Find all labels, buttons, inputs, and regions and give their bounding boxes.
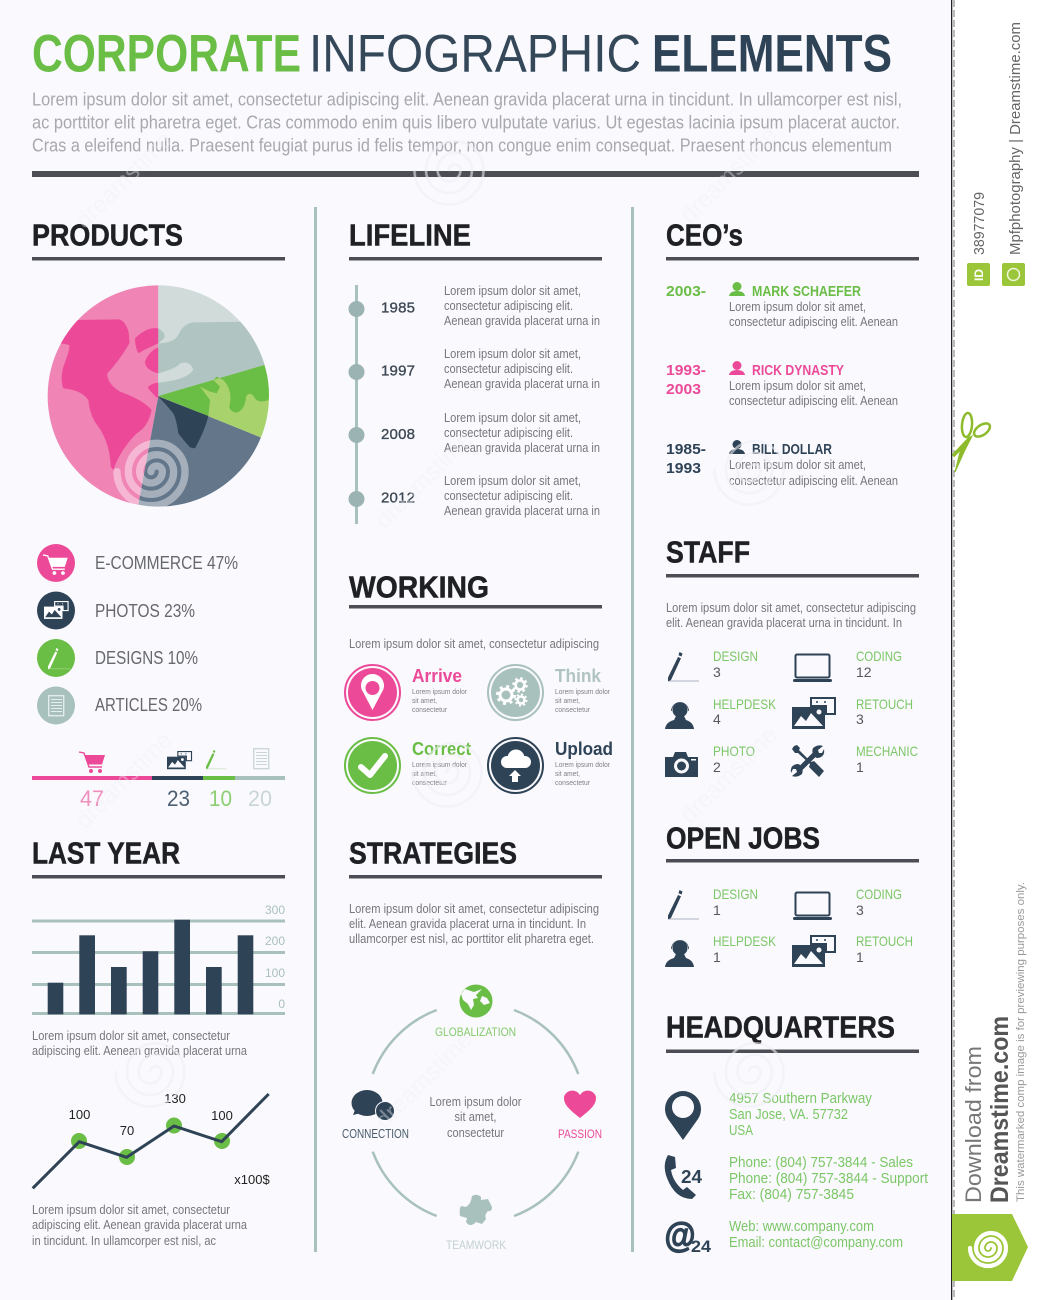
text: strategies intro: Lorem ipsum dolor sit amet, consectetur adipiscing xyxy=(349,902,599,916)
staff: retouch xyxy=(792,696,913,729)
heading: ceos xyxy=(666,218,919,260)
step: think xyxy=(488,665,610,720)
heading: lifeline: LIFELINE xyxy=(349,218,471,252)
ceo: bill dollar: consectetur adipiscing elit. Aenean xyxy=(729,474,898,488)
timeline: Lorem ipsum dolor sit amet, xyxy=(444,347,581,361)
line chart: 100 xyxy=(211,1108,233,1123)
icon: heart xyxy=(564,1091,596,1118)
legend: products xyxy=(37,544,238,724)
line chart: x100$ xyxy=(234,1172,270,1187)
ceo: bill dollar: 1985- xyxy=(666,441,706,458)
text: dreamstime xyxy=(675,721,783,829)
sidebar: green logo tag xyxy=(952,1214,1028,1281)
heading: ceos: CEO’s xyxy=(666,218,743,252)
ceo: bill dollar: 1993 xyxy=(666,460,701,477)
text: dreamstime xyxy=(370,426,478,534)
text: cycle centre xyxy=(430,1095,522,1140)
stacked bar: 20 xyxy=(248,786,272,811)
legend item: designs: DESIGNS 10% xyxy=(95,648,198,668)
timeline: Lorem ipsum dolor sit amet, xyxy=(444,284,581,298)
timeline: 1997 xyxy=(381,362,415,380)
step: correct xyxy=(345,738,471,793)
staff: photo: 2 xyxy=(713,759,721,775)
bar chart: 100 xyxy=(265,966,285,980)
timeline xyxy=(348,284,600,524)
step: correct: consectetur xyxy=(412,778,447,787)
text: staff intro: Lorem ipsum dolor sit amet, consectetur adipiscing xyxy=(666,601,916,615)
job: coding: CODING xyxy=(856,886,902,902)
heading: open jobs: OPEN JOBS xyxy=(666,820,820,856)
text: working intro: Lorem ipsum dolor sit amet, consectetur adipiscing xyxy=(349,637,599,651)
step: arrive: consectetur xyxy=(412,705,447,714)
text: phones: Phone: (804) 757-3844 - Sales xyxy=(729,1155,913,1171)
stacked bar xyxy=(32,749,285,811)
text: bar chart caption xyxy=(32,1029,247,1058)
icon: at 24: 24 xyxy=(691,1237,712,1256)
staff: mechanic: MECHANIC xyxy=(856,743,918,759)
timeline: consectetur adipiscing elit. xyxy=(444,299,573,313)
ceo: mark schaefer: 2003- xyxy=(666,283,706,300)
ceo: mark schaefer: MARK SCHAEFER xyxy=(752,284,861,300)
text: cycle centre: sit amet, xyxy=(454,1110,496,1124)
text: line chart caption: Lorem ipsum dolor sit amet, consectetur xyxy=(32,1203,230,1217)
ceo: mark schaefer xyxy=(666,282,898,329)
staff: coding xyxy=(793,648,902,682)
timeline: consectetur adipiscing elit. xyxy=(444,426,573,440)
staff: photo xyxy=(665,743,755,777)
job: design xyxy=(668,886,758,920)
job: helpdesk xyxy=(665,933,777,967)
step: correct: Lorem ipsum dolor xyxy=(412,760,467,769)
stacked bar: 10 xyxy=(209,786,232,811)
staff: helpdesk xyxy=(665,696,777,729)
job: design: 1 xyxy=(713,902,721,918)
legend item: articles xyxy=(37,686,202,724)
stacked bar: 47 xyxy=(80,786,104,811)
staff: mechanic xyxy=(791,743,918,777)
bar chart xyxy=(32,903,285,1015)
text: strategies intro xyxy=(349,902,599,946)
heading: products xyxy=(32,218,285,260)
text: phones xyxy=(729,1155,928,1203)
icon: puzzle piece xyxy=(460,1195,492,1225)
icon: scissors xyxy=(953,413,992,472)
stacked bar: 23 xyxy=(167,786,190,811)
text: address xyxy=(729,1091,873,1139)
staff grid xyxy=(665,648,918,777)
step: upload xyxy=(488,738,613,793)
line chart: 70 xyxy=(120,1123,134,1138)
intro text: Lorem ipsum dolor sit amet, consectetur adipiscing elit. Aenean gravida placerat urna in tincidunt. In ullamcorper est nisl, xyxy=(32,90,902,110)
staff: helpdesk: 4 xyxy=(713,711,721,727)
icon: at 24: @ xyxy=(664,1216,696,1255)
pie chart with world map xyxy=(48,285,269,507)
staff: coding: CODING xyxy=(856,648,902,664)
icon: speech bubbles xyxy=(352,1090,394,1120)
ceo: mark schaefer: Lorem ipsum dolor sit amet, xyxy=(729,300,866,314)
title: INFOGRAPHIC xyxy=(309,24,641,84)
sidebar: download text: Download from xyxy=(961,1046,986,1203)
icon: location pin xyxy=(665,1091,701,1140)
staff: design: 3 xyxy=(713,664,721,680)
timeline: Lorem ipsum dolor sit amet, xyxy=(444,474,581,488)
heading: headquarters: HEADQUARTERS xyxy=(666,1010,895,1044)
job: design: DESIGN xyxy=(713,886,758,902)
icon: phone 24 xyxy=(665,1155,702,1199)
legend item: photos: PHOTOS 23% xyxy=(95,601,195,621)
ceo: bill dollar xyxy=(666,440,898,488)
staff: mechanic: 1 xyxy=(856,759,864,775)
icon: photos xyxy=(167,752,192,769)
text: web and email xyxy=(729,1219,903,1251)
open jobs grid xyxy=(665,886,913,967)
text: dreamstime xyxy=(675,121,783,229)
ceo: rick dynasty xyxy=(666,361,898,408)
step: arrive: sit amet, xyxy=(412,696,437,705)
text: bar chart caption: adipiscing elit. Aenean gravida placerat urna xyxy=(32,1044,247,1058)
text: address: San Jose, VA. 57732 xyxy=(729,1107,848,1123)
bar chart: 0 xyxy=(278,997,285,1011)
bar chart: 300 xyxy=(265,903,285,917)
step: correct: sit amet, xyxy=(412,769,437,778)
ceo: rick dynasty: RICK DYNASTY xyxy=(752,363,844,379)
icon: document xyxy=(254,749,269,769)
intro text xyxy=(32,90,902,156)
line chart: 130 xyxy=(164,1091,186,1106)
text: address: USA xyxy=(729,1123,753,1139)
timeline: Aenean gravida placerat urna in xyxy=(444,504,600,518)
heading: strategies xyxy=(349,836,602,878)
timeline: Aenean gravida placerat urna in xyxy=(444,377,600,391)
text: dreamstime xyxy=(70,126,178,234)
text: strategies intro: ullamcorper est nisl, ac porttitor elit pharetra eget. xyxy=(349,932,594,946)
job: retouch: RETOUCH xyxy=(856,933,913,949)
job: retouch xyxy=(792,933,913,967)
sidebar: download text: This watermarked comp image is for previewing purposes only. xyxy=(1015,882,1027,1202)
strategy cycle diagram: GLOBALIZATION xyxy=(435,1025,516,1039)
heading: strategies: STRATEGIES xyxy=(349,836,517,870)
ceo: rick dynasty: 2003 xyxy=(666,381,701,398)
ceo: rick dynasty: 1993- xyxy=(666,362,706,379)
step: think: Lorem ipsum dolor xyxy=(555,687,610,696)
line chart xyxy=(33,1091,270,1188)
timeline: 2012 xyxy=(381,490,415,506)
step: upload: Upload xyxy=(555,739,613,759)
step: upload: sit amet, xyxy=(555,769,580,778)
staff: design xyxy=(668,648,758,682)
heading: lifeline xyxy=(349,218,602,260)
legend item: photos xyxy=(37,592,195,630)
staff: coding: 12 xyxy=(856,664,872,680)
job: coding: 3 xyxy=(856,902,864,918)
title xyxy=(32,24,892,84)
heading: staff xyxy=(666,534,919,578)
staff: photo: PHOTO xyxy=(713,743,755,759)
text: line chart caption xyxy=(32,1203,247,1248)
text: cycle centre: Lorem ipsum dolor xyxy=(430,1095,522,1109)
text: phones: Fax: (804) 757-3845 xyxy=(729,1187,854,1203)
sidebar: image id: 38977079 xyxy=(971,192,988,255)
heading: staff: STAFF xyxy=(666,534,750,570)
intro text: Cras a eleifend nulla. Praesent feugiat purus id felis tempor, non congue enim consequat. Praesent rhoncus elementum xyxy=(32,136,892,156)
legend item: designs xyxy=(37,639,198,677)
text: strategies intro: elit. Aenean gravida placerat urna in tincidunt. In xyxy=(349,917,586,931)
sidebar: download text: Dreamstime.com xyxy=(986,1016,1014,1203)
watermarks xyxy=(116,141,784,1106)
text: staff intro xyxy=(666,601,916,630)
text: staff intro: elit. Aenean gravida placerat urna in tincidunt. In xyxy=(666,616,902,630)
ceo: rick dynasty: Lorem ipsum dolor sit amet, xyxy=(729,379,866,393)
timeline: 2008 xyxy=(381,426,415,443)
timeline: Aenean gravida placerat urna in xyxy=(444,314,600,328)
heading: open jobs xyxy=(666,820,919,862)
timeline: Aenean gravida placerat urna in xyxy=(444,441,600,455)
text: address: 4957 Southern Parkway xyxy=(729,1091,873,1107)
staff: retouch: RETOUCH xyxy=(856,696,913,712)
text: web and email: Web: www.company.com xyxy=(729,1219,874,1235)
strategy cycle diagram: TEAMWORK xyxy=(446,1238,506,1252)
text: dreamstime xyxy=(370,1026,478,1134)
step: upload: Lorem ipsum dolor xyxy=(555,760,610,769)
staff: helpdesk: HELPDESK xyxy=(713,696,777,712)
icon: phone 24: 24 xyxy=(681,1167,702,1187)
step: think: sit amet, xyxy=(555,696,580,705)
step: think: consectetur xyxy=(555,705,590,714)
text: bar chart caption: Lorem ipsum dolor sit amet, consectetur xyxy=(32,1029,230,1043)
timeline: consectetur adipiscing elit. xyxy=(444,362,573,376)
text: line chart caption: adipiscing elit. Aenean gravida placerat urna xyxy=(32,1218,247,1232)
line chart: 100 xyxy=(69,1107,90,1122)
title: CORPORATE xyxy=(32,24,301,84)
heading: working: WORKING xyxy=(349,570,489,604)
title: ELEMENTS xyxy=(652,24,892,84)
timeline: consectetur adipiscing elit. xyxy=(444,489,573,503)
sidebar: download text xyxy=(961,882,1027,1203)
job: coding xyxy=(793,886,902,920)
step: correct: Correct xyxy=(412,739,471,759)
legend item: e-commerce xyxy=(37,544,238,582)
ceo: mark schaefer: consectetur adipiscing elit. Aenean xyxy=(729,315,898,329)
ceo: bill dollar: Lorem ipsum dolor sit amet, xyxy=(729,458,866,472)
intro text: ac porttitor elit pharetra eget. Cras commodo enim quis libero vulputate varius. Ut egestas lacinia ipsum placerat auctor. xyxy=(32,112,900,132)
text: phones: Phone: (804) 757-3844 - Support xyxy=(729,1171,928,1187)
staff: design: DESIGN xyxy=(713,648,758,664)
icon: globe xyxy=(460,984,492,1018)
ceo: bill dollar: BILL DOLLAR xyxy=(752,442,832,458)
sidebar: image id xyxy=(967,192,990,286)
icon: cart xyxy=(79,752,105,773)
sidebar: credit: Mpfphotography | Dreamstime.com xyxy=(1007,22,1024,255)
strategy cycle diagram: PASSION xyxy=(558,1127,602,1141)
step: arrive: Lorem ipsum dolor xyxy=(412,687,467,696)
text: web and email: Email: contact@company.com xyxy=(729,1235,903,1251)
bar chart: 200 xyxy=(265,934,285,948)
text: cycle centre: consectetur xyxy=(447,1126,504,1140)
staff: retouch: 3 xyxy=(856,711,864,727)
step: arrive: Arrive xyxy=(412,666,462,686)
step: upload: consectetur xyxy=(555,778,590,787)
text: line chart caption: in tincidunt. In ullamcorper est nisl, ac xyxy=(32,1234,216,1248)
job: retouch: 1 xyxy=(856,949,864,965)
legend item: e-commerce: E-COMMERCE 47% xyxy=(95,553,238,573)
step: arrive xyxy=(345,665,467,720)
ceo: rick dynasty: consectetur adipiscing elit. Aenean xyxy=(729,394,898,408)
icon: pen xyxy=(206,750,226,769)
job: helpdesk: 1 xyxy=(713,949,721,965)
heading: products: PRODUCTS xyxy=(32,218,183,252)
legend item: articles: ARTICLES 20% xyxy=(95,695,202,715)
text: dreamstime xyxy=(70,726,178,834)
heading: last year xyxy=(32,836,285,878)
sidebar: image id: ID xyxy=(972,269,986,281)
timeline: Lorem ipsum dolor sit amet, xyxy=(444,411,581,425)
strategy cycle diagram: CONNECTION xyxy=(342,1127,409,1141)
job: helpdesk: HELPDESK xyxy=(713,933,777,949)
heading: last year: LAST YEAR xyxy=(32,836,180,870)
sidebar: credit xyxy=(1002,22,1025,286)
heading: working xyxy=(349,570,602,608)
step: think: Think xyxy=(555,666,602,686)
strategy cycle diagram xyxy=(342,984,602,1252)
timeline: 1985 xyxy=(381,300,415,316)
